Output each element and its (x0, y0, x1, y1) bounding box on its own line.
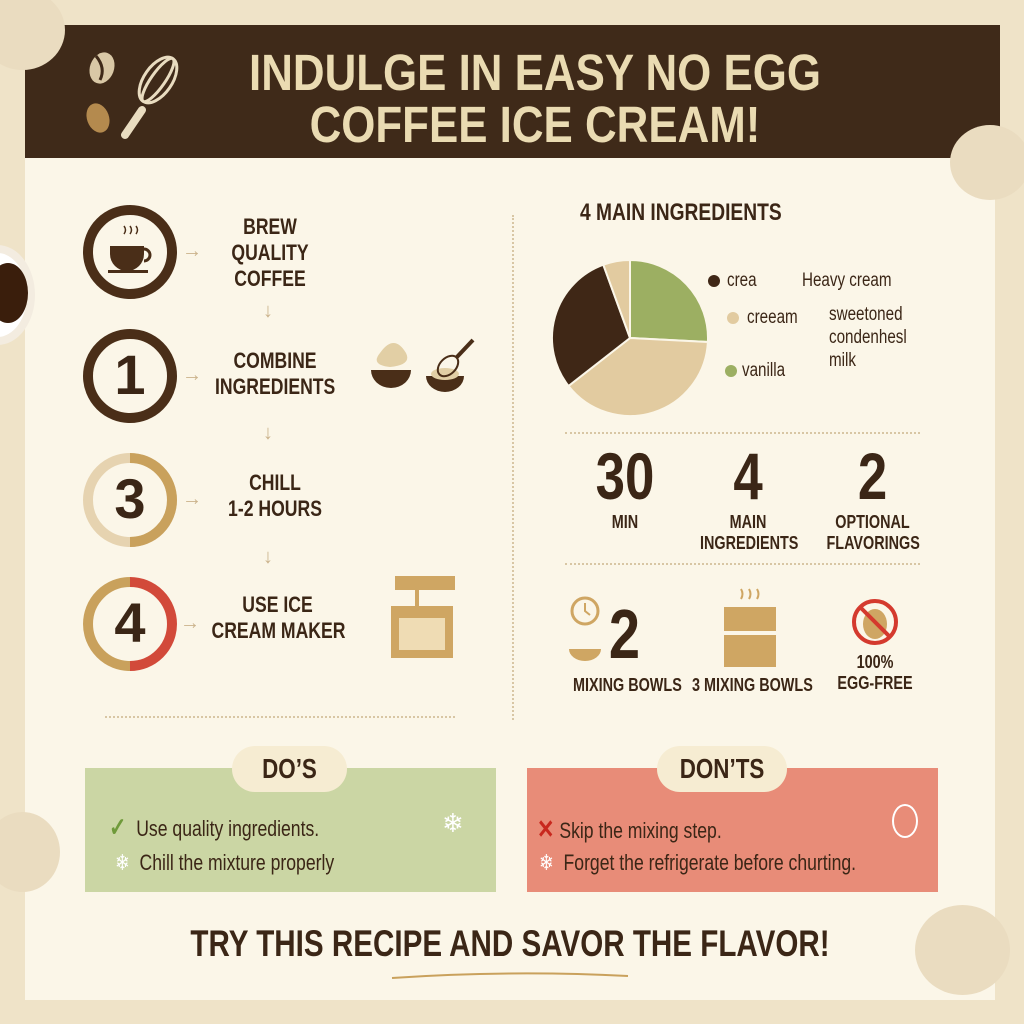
header banner (25, 25, 1000, 158)
stats row (596, 439, 920, 553)
step 1: brew: → (182, 240, 202, 262)
underline swoosh (392, 972, 628, 979)
step 4: ice cream maker: CREAM MAKER (212, 618, 345, 643)
icon: no egg 100% egg-free: EGG-FREE (837, 673, 913, 693)
step 4: ice cream maker: → (180, 612, 200, 634)
panel: don'ts (527, 768, 938, 892)
equipment row (569, 588, 913, 695)
icon: no egg 100% egg-free (837, 599, 913, 693)
stat: 4 ingredients: 4 (733, 439, 763, 513)
decoration: ice cream cones corners (0, 0, 65, 70)
icon: machine 3 mixing bowls (692, 588, 813, 695)
panel: do's: ❄ (442, 808, 464, 838)
title (249, 44, 821, 153)
pie chart (552, 261, 707, 416)
step 4: ice cream maker: 4 (114, 591, 146, 654)
do's label (232, 746, 347, 792)
step 4: ice cream maker (83, 576, 455, 671)
step 2: combine: COMBINE (233, 348, 317, 373)
icon: coffee beans and whisk (86, 52, 178, 139)
step 3: chill (83, 453, 322, 547)
stat: 2 flavorings: OPTIONAL (835, 512, 910, 532)
step 1: brew: QUALITY (231, 240, 309, 265)
icon: machine (391, 576, 455, 658)
icon: no egg 100% egg-free: 100% (857, 652, 893, 672)
do item 2: ❄ Chill the mixture properly (115, 850, 334, 875)
pie legend (708, 270, 907, 381)
step 3: chill: → (182, 488, 202, 510)
dotted dividers (565, 432, 920, 434)
step 4: ice cream maker: USE ICE (242, 592, 313, 617)
step 2: combine: 1 (114, 343, 146, 406)
pie legend: sweetoned (829, 304, 903, 325)
stat: 4 ingredients (700, 439, 798, 553)
title: INDULGE IN EASY NO EGG (249, 44, 821, 101)
arrow down: ↓ (263, 300, 273, 322)
icon: timer and bowl with 2 (569, 595, 682, 695)
icon: machine 3 mixing bowls: 3 MIXING BOWLS (692, 675, 813, 695)
dont item 1: ✕ Skip the mixing step. (537, 814, 722, 844)
stat: 30 min: 30 (596, 439, 654, 513)
step 1: brew (83, 205, 309, 299)
step 1: brew: BREW (243, 214, 297, 239)
stat: 4 ingredients: INGREDIENTS (700, 533, 798, 553)
don'ts label (657, 746, 787, 792)
stat: 2 flavorings: FLAVORINGS (826, 533, 920, 553)
panel: do's (85, 768, 496, 892)
steps panel (83, 205, 474, 671)
dont item 2: ❄ Forget the refrigerate before churting. (539, 850, 856, 875)
pie legend: crea (727, 270, 757, 291)
pie legend: creeam (747, 307, 798, 328)
stat: 2 flavorings: 2 (858, 439, 887, 513)
pie legend: vanilla (742, 360, 785, 381)
stat: 30 min: MIN (612, 512, 638, 532)
stat: 2 flavorings (826, 439, 920, 553)
icon: timer and bowl with 2: 2 (609, 595, 640, 673)
footer callout: TRY THIS RECIPE AND SAVOR THE FLAVOR! (190, 923, 830, 964)
stat: 4 ingredients: MAIN (730, 512, 766, 532)
step 3: chill: CHILL (249, 470, 301, 495)
don'ts label: DON’TS (680, 753, 764, 784)
arrow down: ↓ (263, 422, 273, 444)
pie legend: condenhesl (829, 327, 907, 348)
step 3: chill: 3 (114, 467, 146, 530)
pie legend: Heavy cream (802, 270, 892, 291)
step 2: combine: INGREDIENTS (215, 374, 335, 399)
icon: bowls and whisk (371, 338, 474, 392)
title: COFFEE ICE CREAM! (310, 96, 760, 153)
step 3: chill: 1-2 HOURS (228, 496, 322, 521)
step 1: brew: COFFEE (234, 266, 306, 291)
ingredients title: 4 MAIN INGREDIENTS (580, 199, 782, 226)
arrow down: ↓ (263, 546, 273, 568)
step 2: combine (83, 329, 474, 423)
do's label: DO’S (262, 753, 317, 784)
step 2: combine: → (182, 364, 202, 386)
icon: timer and bowl with 2: MIXING BOWLS (573, 675, 682, 695)
do item 1: ✓ Use quality ingredients. (109, 812, 319, 842)
pie legend: milk (829, 350, 856, 371)
